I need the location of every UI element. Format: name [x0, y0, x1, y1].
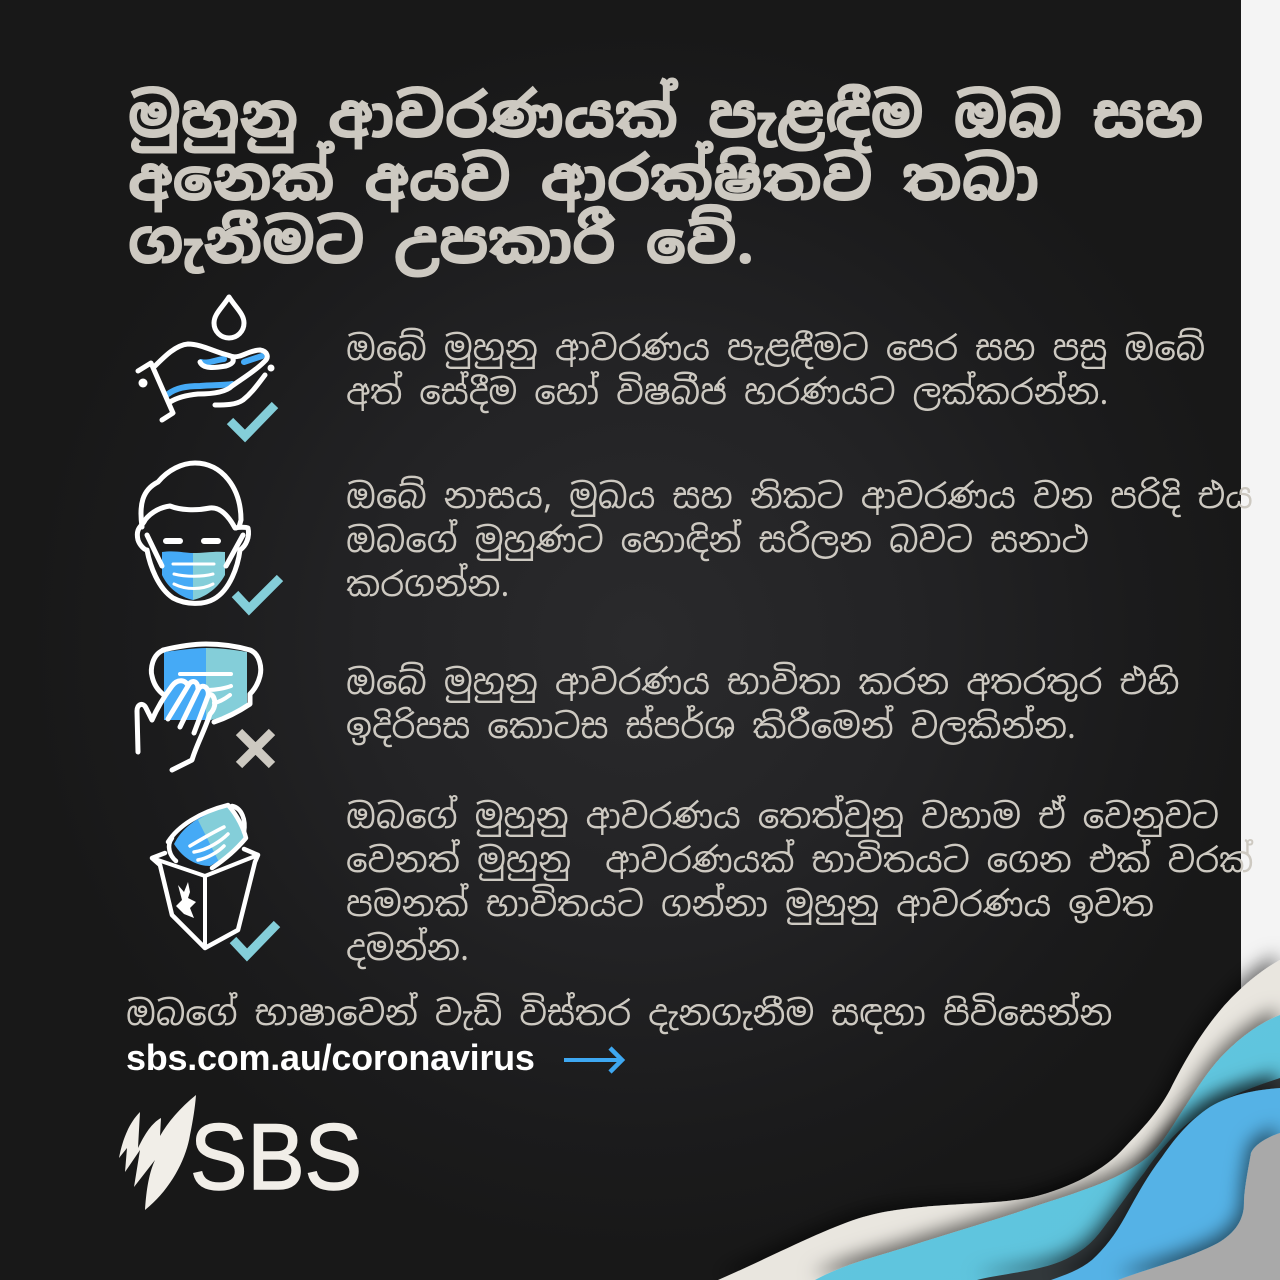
title: මුහුනු ආවරණයක් පැළඳීම ඔබ සහ අනෙක් අයව ආරක්ෂිතව තබා ගැනීමට උපකාරී වේ. — [128, 76, 1203, 281]
SBS logo: SBS — [190, 1104, 362, 1209]
text block: step 4: ඔබගේ මුහුනු ආවරණය තෙත්වුනු වහාම ඒ වෙනුවට වෙනත් මුහුනු ආවරණයක් භාවිතයට ගෙන එක් වරක් පමනක් භාවිතයට ගන්නා මුහුනු ආවරණය ඉවත දමන්න. — [346, 794, 1253, 970]
text block: step 3: ඔබේ මුහුනු ආවරණය භාවිතා කරන අතරතුර එහි ඉදිරිපස කොටස ස්පර්ශ කිරීමෙන් වලකින්න. — [346, 660, 1180, 748]
text block: step 1: ඔබේ මුහුනු ආවරණය පැළඳීමට පෙර සහ පසු ඔබේ අත් සේදීම හෝ විෂබීජ හරණයට ලක්කරන්න. — [346, 326, 1205, 414]
icon detail: bin logo — [176, 882, 196, 918]
website link: sbs.com.au/coronavirus — [126, 1037, 535, 1078]
text block: more information prompt: ඔබගේ භාෂාවෙන් වැඩි විස්තර දැනගැනීම සඳහා පිවිසෙන්න — [126, 991, 1112, 1035]
text block: step 2: ඔබේ නාසය, මුඛය සහ නිකට ආවරණය වන පරිදි එය ඔබගේ මුහුණට හොඳින් සරිලන බවට සනාථ කරගන්න. — [346, 474, 1253, 606]
